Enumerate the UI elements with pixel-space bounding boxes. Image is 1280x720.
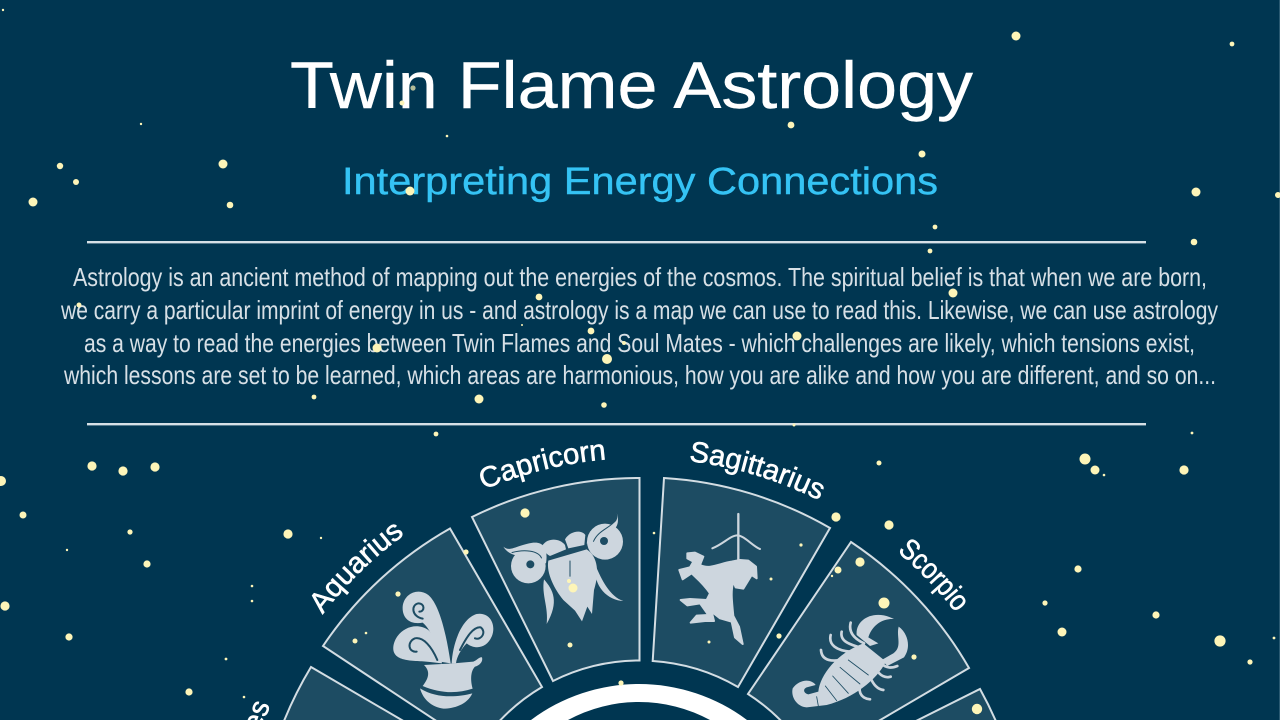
title: Twin Flame Astrology	[290, 48, 973, 122]
panel: scorpio	[746, 539, 970, 720]
icon: scorpion	[792, 615, 908, 707]
zodiac wheel	[248, 442, 996, 720]
icon: capricorn goat head	[503, 513, 623, 624]
icon: water bearer fountain	[393, 592, 493, 709]
subtitle: Interpreting Energy Connections	[342, 161, 938, 203]
label: sagittarius: Sagittarius	[690, 442, 824, 499]
panel: capricorn	[470, 444, 640, 682]
intro text block	[60, 262, 1218, 390]
icon: centaur archer	[679, 514, 760, 644]
central white ring	[531, 684, 747, 720]
label: scorpio: Scorpio	[900, 539, 966, 610]
label: capricorn: Capricorn	[480, 444, 605, 487]
panel: pisces	[248, 666, 404, 720]
label: aquarius: Aquarius	[312, 524, 403, 615]
panel: aquarius	[312, 524, 544, 720]
panel: sagittarius	[652, 442, 832, 688]
panel: libra	[906, 689, 998, 720]
